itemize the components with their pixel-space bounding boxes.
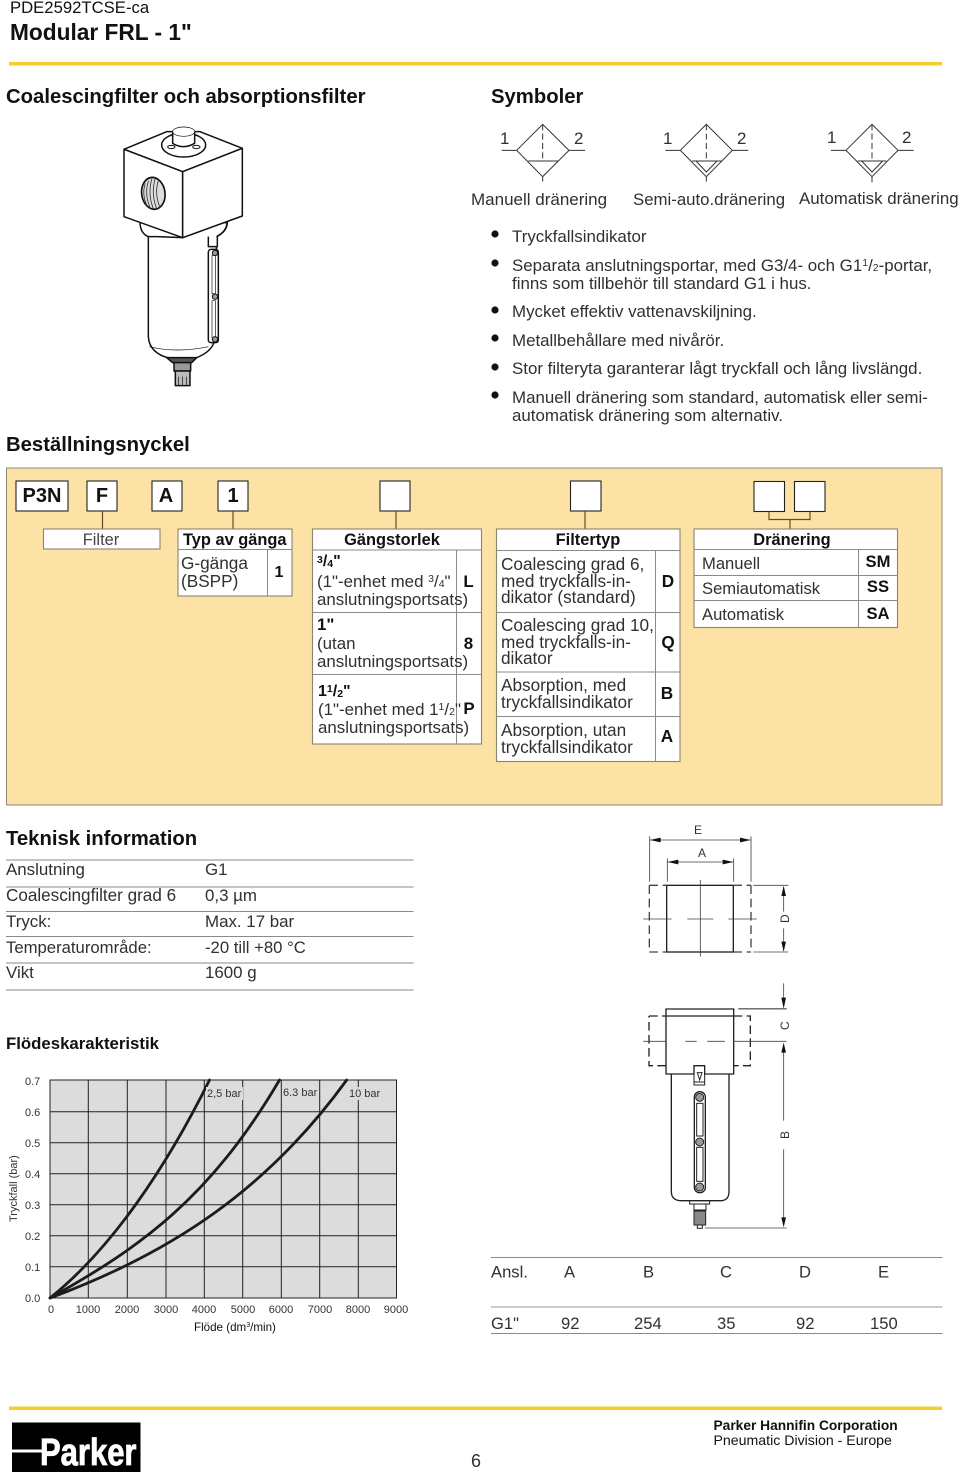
table: thread size: anslutningsportsats): [317, 652, 468, 671]
curve labels: 10 bar: [349, 1088, 381, 1100]
table: drainage: Automatisk: [702, 605, 785, 624]
feature bullet list: Mycket effektiv vattenavskiljning.: [512, 302, 757, 321]
table: thread size: 1": [317, 615, 334, 634]
table: technical information: Tryck:: [6, 912, 51, 931]
table: thread size: 1: [439, 701, 445, 713]
symbol port numbers: 2: [737, 129, 746, 148]
company details: Parker Hannifin Corporation: [714, 1418, 898, 1433]
company details: [714, 1418, 898, 1448]
table: thread type: Typ av gänga: [183, 531, 287, 549]
table: dimensions: C: [720, 1262, 732, 1282]
heading: symbols: Symboler: [491, 86, 584, 108]
table: thread size: ": [343, 683, 351, 700]
table: thread size: L: [463, 572, 474, 591]
table: filter: Filter: [83, 531, 120, 549]
table: drainage: Semiautomatisk: [702, 579, 821, 598]
table: thread size: 3: [428, 573, 434, 585]
table: thread size: (1"-enhet med: [317, 572, 423, 591]
x axis labels: 2000: [115, 1304, 139, 1316]
table: thread size: anslutningsportsats): [317, 590, 468, 609]
table: technical information: 1600 g: [205, 963, 257, 982]
curve labels: 6.3 bar: [283, 1087, 318, 1099]
table: dimensions: D: [799, 1262, 811, 1282]
table: filter type: tryckfallsindikator: [501, 692, 633, 712]
feature bullet list: Separata anslutningsportar, med G3/4- och G1: [512, 256, 862, 275]
table: thread size: (utan: [317, 634, 356, 653]
table: technical information: Anslutning: [6, 860, 85, 879]
x axis title: Flöde (dm: [194, 1321, 246, 1334]
table: technical information: Coalescingfilter grad 6: [6, 886, 176, 905]
curves: [50, 1080, 347, 1298]
symbol port numbers: [500, 128, 911, 148]
feature bullet list: 1: [862, 257, 868, 269]
table: thread type: (BSPP): [181, 571, 238, 591]
table: thread size: /: [323, 553, 328, 570]
symbol captions: Semi-auto.dränering: [633, 190, 785, 209]
x axis title: 3: [246, 1322, 250, 1329]
dimension letters: top view: E: [694, 823, 702, 837]
table: thread size: 1: [318, 683, 327, 700]
table: filter type: Coalescing grad 10,: [501, 615, 654, 635]
table: filter type: Q: [661, 632, 675, 652]
feature bullet list: Metallbehållare med nivårör.: [512, 331, 724, 350]
heading: filter: Coalescingfilter och absorptionsfilter: [6, 86, 366, 108]
table: filter type: Filtertyp: [556, 531, 620, 549]
x axis labels: 4000: [192, 1304, 216, 1316]
x axis labels: [48, 1304, 408, 1316]
table: dimensions: G1": [491, 1314, 519, 1333]
key boxes: P3N: [23, 485, 61, 507]
table: filter type: D: [662, 571, 674, 591]
table: technical information: Max. 17 bar: [205, 912, 295, 931]
top yellow rule: [9, 62, 942, 66]
table: thread size: Gängstorlek: [344, 531, 441, 549]
feature bullet list: Manuell dränering som standard, automatisk eller semi-: [512, 388, 928, 407]
table: thread size: 2": [449, 700, 461, 719]
table: technical information: Vikt: [6, 963, 34, 982]
table: dimensions: [491, 1258, 942, 1334]
feature bullet list: Stor filteryta garanterar lågt tryckfall och lång livslängd.: [512, 359, 922, 378]
x axis title: /min): [250, 1321, 276, 1334]
symbol: manual drain: [502, 124, 585, 182]
table: technical information: -20 till +80 °C: [205, 938, 306, 957]
table: dimensions: B: [643, 1262, 654, 1282]
page number: 6: [471, 1451, 481, 1471]
company details: Pneumatic Division - Europe: [714, 1432, 892, 1448]
symbol port numbers: 2: [574, 129, 583, 148]
panel: order key: [6, 468, 942, 805]
y axis labels: 0.6: [25, 1107, 40, 1119]
drawing: top view with dimensions: [643, 836, 788, 1009]
table: technical information: G1: [205, 860, 228, 879]
feature bullet list: 2-portar,: [873, 256, 932, 275]
key boxes: F: [96, 485, 108, 507]
x axis labels: 6000: [269, 1304, 293, 1316]
table: thread size: ": [333, 553, 341, 570]
table: thread size: 1: [327, 683, 333, 695]
table: thread type: [178, 529, 292, 596]
table: filter type: [496, 529, 680, 762]
table: dimensions: 150: [870, 1314, 898, 1333]
illustration: filter unit: [124, 127, 242, 386]
table: technical information: 0,3 µm: [205, 886, 257, 905]
key boxes: [16, 481, 825, 512]
y axis labels: [25, 1076, 40, 1305]
y axis labels: 0.1: [25, 1262, 40, 1274]
curve labels: 2,5 bar: [207, 1088, 242, 1100]
feature bullet list: finns som tillbehör till standard G1 i hus.: [512, 274, 811, 293]
table: thread size: 3: [317, 554, 323, 566]
table: filter type: tryckfallsindikator: [501, 737, 633, 757]
table: dimensions: 92: [796, 1314, 814, 1333]
table: drainage: [694, 529, 898, 628]
x axis labels: 9000: [384, 1304, 408, 1316]
table: dimensions: Ansl.: [491, 1262, 528, 1282]
connectors: [102, 511, 810, 528]
table: thread size: 8: [464, 634, 473, 653]
table: thread size: [312, 529, 482, 744]
table: technical information: Temperaturområde:: [6, 938, 152, 957]
table: thread type: 1: [275, 564, 284, 581]
table: thread size: /: [434, 572, 439, 591]
heading: order key: Beställningsnyckel: [6, 434, 190, 456]
table: drainage: Manuell: [702, 554, 760, 573]
feature bullet list: Tryckfallsindikator: [512, 227, 647, 246]
table: filter type: med tryckfalls-in-: [501, 571, 631, 591]
x axis labels: 0: [48, 1304, 54, 1316]
x axis labels: 1000: [76, 1304, 100, 1316]
dimension letters: top view: A: [698, 846, 706, 860]
y axis labels: 0.5: [25, 1138, 40, 1150]
table: thread size: (1"-enhet med 1: [318, 700, 439, 719]
table: technical information: [6, 860, 414, 990]
table: dimensions: 35: [717, 1314, 735, 1333]
table: filter type: B: [661, 683, 673, 703]
symbol port numbers: 2: [902, 128, 911, 147]
y axis title: Tryckfall (bar): [8, 1155, 20, 1222]
y axis labels: 0.0: [25, 1293, 40, 1305]
table: thread size: anslutningsportsats): [318, 718, 469, 737]
page title: Modular FRL - 1": [10, 19, 192, 45]
y axis labels: 0.4: [25, 1169, 40, 1181]
dimension letters: top view: D: [778, 914, 792, 923]
symbol captions: [471, 189, 959, 209]
dimension letters: top view: [694, 823, 792, 1139]
symbol port numbers: 1: [500, 129, 509, 148]
table: thread size: 4: [327, 558, 333, 570]
heading: technical information: Teknisk information: [6, 828, 197, 850]
table: drainage: SA: [866, 604, 890, 623]
table: thread size: /: [333, 683, 338, 700]
feature bullet list: automatisk dränering som alternativ.: [512, 406, 783, 425]
table: thread size: P: [463, 699, 475, 718]
x axis labels: 3000: [154, 1304, 178, 1316]
y axis labels: 0.3: [25, 1200, 40, 1212]
key boxes: A: [159, 485, 173, 507]
table: drainage: SM: [866, 552, 890, 571]
table: dimensions: 92: [561, 1314, 579, 1333]
symbol captions: Automatisk dränering: [799, 189, 959, 208]
feature bullet list: [491, 227, 932, 425]
table: dimensions: 254: [634, 1314, 662, 1333]
chart: pressure drop vs flow: [8, 1076, 408, 1334]
table: filter type: Coalescing grad 6,: [501, 554, 644, 574]
dimension letters: top view: B: [778, 1131, 792, 1139]
table: filter type: Absorption, med: [501, 675, 626, 695]
table: filter type: dikator: [501, 648, 553, 668]
symbol: automatic drain: [831, 124, 914, 182]
logo: Parker: [12, 1422, 140, 1474]
key boxes: 1: [227, 485, 239, 507]
drawing: front view with dimensions: [643, 1009, 787, 1228]
x axis labels: 8000: [346, 1304, 370, 1316]
table: drainage: Dränering: [753, 531, 831, 549]
table: filter type: med tryckfalls-in-: [501, 632, 631, 652]
table: thread size: 2: [337, 688, 343, 700]
table: filter: [44, 529, 160, 549]
table: drainage: SS: [867, 577, 889, 596]
x axis labels: 5000: [231, 1304, 255, 1316]
table: thread size: 4": [439, 572, 451, 591]
feature bullet list: /: [868, 256, 873, 275]
bottom yellow rule: [9, 1406, 942, 1410]
table: thread size: /: [444, 700, 449, 719]
symbol captions: Manuell dränering: [471, 190, 607, 209]
symbol port numbers: 1: [827, 128, 836, 147]
y axis labels: 0.7: [25, 1076, 40, 1088]
y axis labels: 0.2: [25, 1231, 40, 1243]
table: filter type: Absorption, utan: [501, 720, 626, 740]
table: filter type: dikator (standard): [501, 587, 636, 607]
table: thread type: G-gänga: [181, 553, 248, 573]
dimension letters: top view: C: [778, 1021, 792, 1030]
table: dimensions: E: [878, 1262, 889, 1282]
curve labels: [206, 1086, 381, 1100]
symbol port numbers: 1: [663, 129, 672, 148]
x axis labels: 7000: [308, 1304, 332, 1316]
symbol: semi-automatic drain: [665, 124, 748, 182]
table: filter type: A: [661, 726, 673, 746]
heading: flow characteristics: Flödeskarakteristik: [6, 1034, 160, 1053]
logo: Parker: Parker: [40, 1432, 136, 1474]
table: dimensions: A: [564, 1262, 576, 1282]
